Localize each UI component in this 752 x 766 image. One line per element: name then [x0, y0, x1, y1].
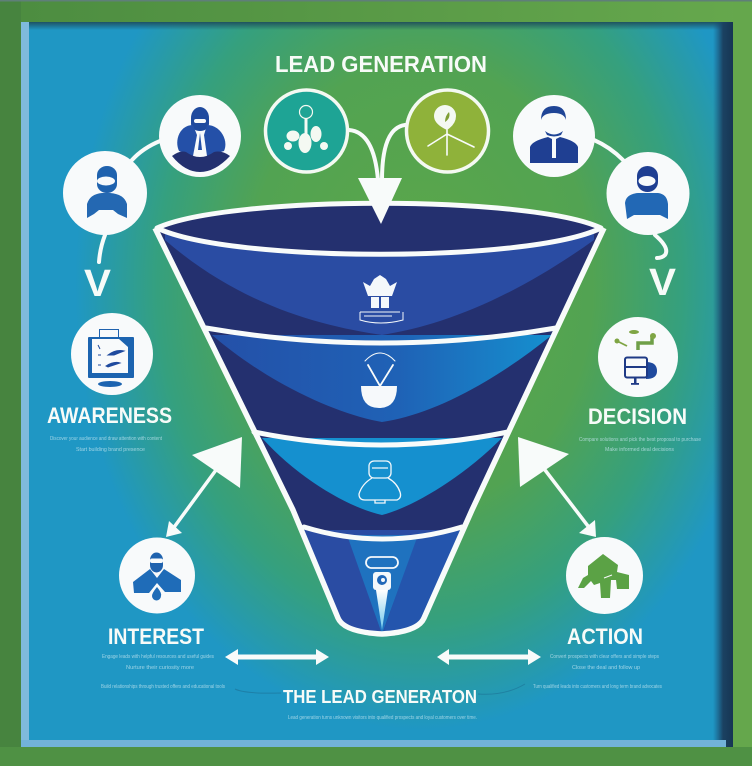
- title: LEAD GENERATION: [275, 51, 487, 77]
- text: action note: Close the deal and follow up: [572, 665, 640, 671]
- icon: funnel figure: [359, 461, 401, 503]
- text: interest note: Nurture their curiosity more: [126, 665, 194, 671]
- arrow: into funnel: [358, 178, 402, 224]
- icon: person upper left: [63, 151, 147, 235]
- label: action: ACTION: [567, 624, 643, 649]
- text: action note: Turn qualified leads into customers and long term brand advocates: [533, 684, 662, 690]
- text: decision note: Compare solutions and pick the best proposal to purchase: [579, 437, 701, 443]
- label: awareness: AWARENESS: [47, 403, 172, 428]
- funnel: [155, 200, 604, 640]
- connector lines: [99, 125, 666, 262]
- arrow: left diagonal: [166, 437, 242, 537]
- funnel rim: [157, 203, 601, 254]
- arrow: right diagonal: [518, 437, 596, 537]
- icon: interest: [119, 538, 195, 614]
- arrow: right horizontal: [437, 649, 541, 665]
- icon: funnel crown: [360, 275, 403, 323]
- text: awareness note: [50, 436, 162, 453]
- icon: olive green circle: [406, 90, 488, 172]
- icon: person upper right: [606, 152, 690, 235]
- text: awareness note: Start building brand presence: [76, 447, 145, 453]
- text: decision note: [579, 437, 701, 453]
- funnel stage fills: [165, 200, 594, 640]
- text: interest note: Build relationships through trusted offers and educational tools: [101, 684, 225, 690]
- icon: person top right: [513, 95, 595, 177]
- icon: action: [566, 537, 643, 614]
- text: awareness note: Discover your audience and draw attention with content: [50, 436, 162, 442]
- footer lines: [235, 684, 525, 694]
- text: interest note: Engage leads with helpful resources and useful guides: [102, 654, 214, 660]
- arrow: left down V: V: [84, 263, 112, 305]
- icon: teal medical circle: [266, 90, 348, 172]
- label: decision: DECISION: [588, 404, 687, 429]
- arrow: left horizontal: [225, 649, 329, 665]
- text: interest note: [101, 654, 225, 690]
- text: decision note: Make informed deal decisions: [605, 447, 674, 453]
- footer title: THE LEAD GENERATON: [283, 687, 477, 707]
- icon: funnel bowl: [361, 353, 397, 408]
- icon: funnel pin: [366, 557, 398, 630]
- arrow: right down V: V: [649, 262, 677, 304]
- icon: decision: [598, 317, 678, 397]
- text: action note: [533, 654, 662, 690]
- icon: person top left: [159, 95, 241, 177]
- icon: awareness: [71, 313, 153, 395]
- text: action note: Convert prospects with clear offers and simple steps: [550, 654, 659, 660]
- label: interest: INTEREST: [108, 624, 204, 649]
- footer text: Lead generation turns unknown visitors into qualified prospects and loyal customers over time.: [288, 715, 477, 721]
